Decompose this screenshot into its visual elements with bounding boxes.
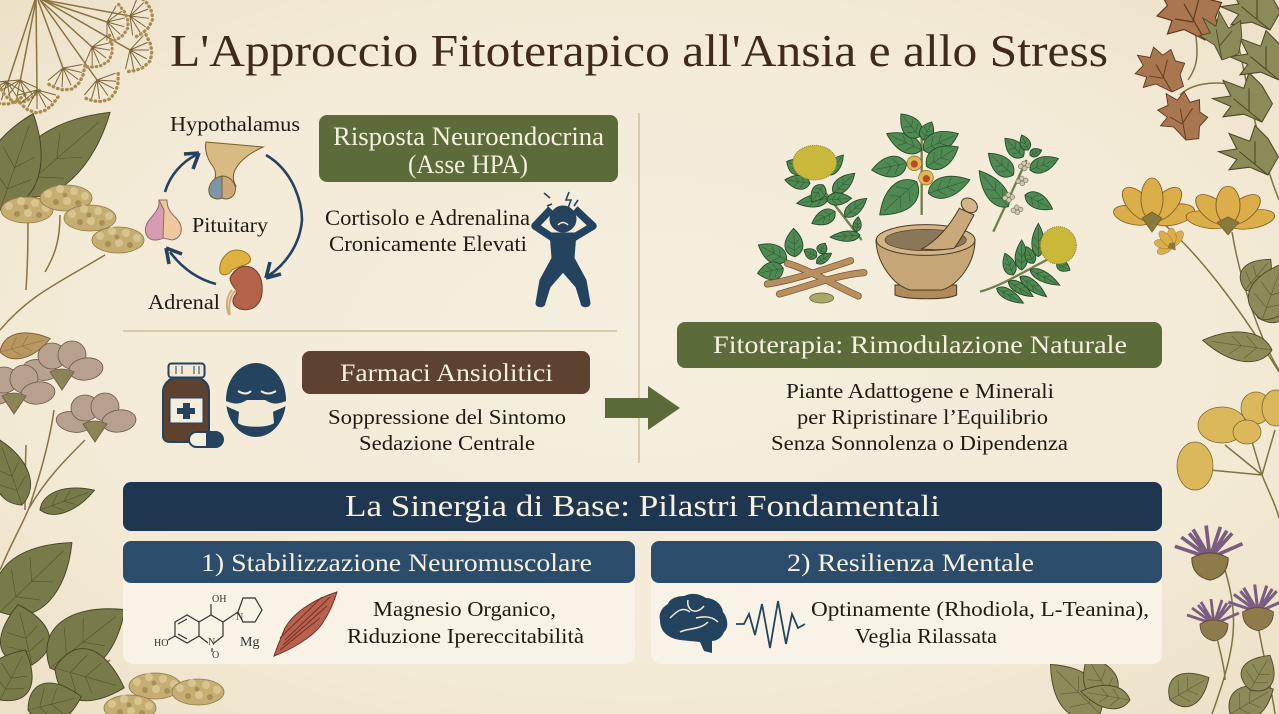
icon: hypothalamus gland — [205, 142, 263, 199]
text: cortisolo: Cortisolo e Adrenalina — [325, 205, 530, 230]
text: piante adattogene: per Ripristinare l’Equilibrio — [797, 405, 1048, 429]
banner: la sinergia di base: La Sinergia di Base: Pilastri Fondamentali — [345, 488, 940, 523]
icon: molecule: Mg — [240, 635, 259, 650]
icon: molecule: O — [212, 650, 219, 661]
text: soppressione: Soppressione del Sintomo — [328, 405, 566, 429]
mortar and pestle — [895, 285, 957, 299]
heading: risposta neuroendocrina — [319, 115, 618, 182]
botanical border: left — [0, 0, 224, 714]
heading: pillar 2 — [651, 541, 1162, 583]
rhodiola flower heads — [793, 145, 1076, 264]
label: pituitary: Pituitary — [192, 213, 269, 237]
panel: stabilizzazione neuromuscolare — [123, 541, 635, 664]
icon: molecule: OH — [212, 594, 226, 605]
icon: stressed person — [535, 192, 593, 307]
panel: resilienza mentale — [651, 541, 1162, 664]
text: cortisolo: Cronicamente Elevati — [329, 231, 527, 256]
botanical border: right — [1035, 0, 1279, 714]
icon: molecule: N — [236, 612, 243, 623]
text: piante adattogene: Piante Adattogene e Minerali — [786, 379, 1054, 403]
title: L'Approccio Fitoterapico all'Ansia e allo Stress — [170, 25, 1108, 76]
text: magnesio: Magnesio Organico, — [373, 597, 556, 621]
ashwagandha berries — [907, 156, 933, 185]
icon: sedated masked face — [226, 363, 286, 437]
text: magnesio — [347, 597, 585, 648]
heading: farmaci ansiolitici — [302, 351, 590, 394]
icon: adrenal gland and kidney — [220, 250, 262, 315]
icon: pituitary gland — [145, 200, 181, 240]
text: soppressione: Sedazione Centrale — [359, 431, 535, 455]
icon: muscle — [274, 592, 337, 656]
label: adrenal: Adrenal — [148, 290, 220, 314]
text: magnesio: Riduzione Ipereccitabilità — [347, 624, 585, 648]
text: optinamente — [811, 597, 1149, 648]
arrow — [605, 386, 680, 430]
icon: medicine bottle and pill — [163, 364, 223, 447]
small white flowers — [1003, 161, 1030, 215]
text: piante adattogene — [771, 379, 1069, 455]
roots — [767, 261, 864, 296]
heading: fitoterapia: Fitoterapia: Rimodulazione Naturale — [713, 332, 1127, 359]
vertical divider — [638, 113, 640, 463]
heading: pillar 2: 2) Resilienza Mentale — [787, 550, 1034, 577]
label: hypothalamus: Hypothalamus — [170, 112, 300, 136]
icon: brain — [660, 594, 727, 653]
icon: brain wave — [736, 601, 805, 648]
heading: farmaci ansiolitici: Farmaci Ansiolitici — [340, 360, 553, 387]
text: optinamente: Veglia Rilassata — [855, 624, 998, 648]
heading: risposta neuroendocrina: (Asse HPA) — [408, 150, 528, 179]
text: optinamente: Optinamente (Rhodiola, L-Teanina), — [811, 597, 1149, 621]
heading: pillar 1 — [123, 541, 635, 583]
icon: molecule: HO — [154, 638, 168, 649]
panel: HPA axis cycle — [145, 112, 302, 315]
heading: pillar 1: 1) Stabilizzazione Neuromuscolare — [201, 550, 592, 577]
cycle arrows — [165, 153, 302, 284]
heading: fitoterapia — [677, 322, 1162, 368]
text: piante adattogene: Senza Sonnolenza o Dipendenza — [771, 431, 1069, 455]
divider — [123, 330, 617, 332]
text: cortisolo — [325, 205, 530, 256]
illustration: herbs and mortar — [754, 108, 1076, 307]
text: soppressione — [328, 405, 566, 455]
icon: molecule: N — [208, 637, 215, 648]
heading: risposta neuroendocrina: Risposta Neuroendocrina — [333, 122, 604, 151]
banner: la sinergia di base — [123, 482, 1162, 531]
icon: molecule — [154, 594, 262, 661]
